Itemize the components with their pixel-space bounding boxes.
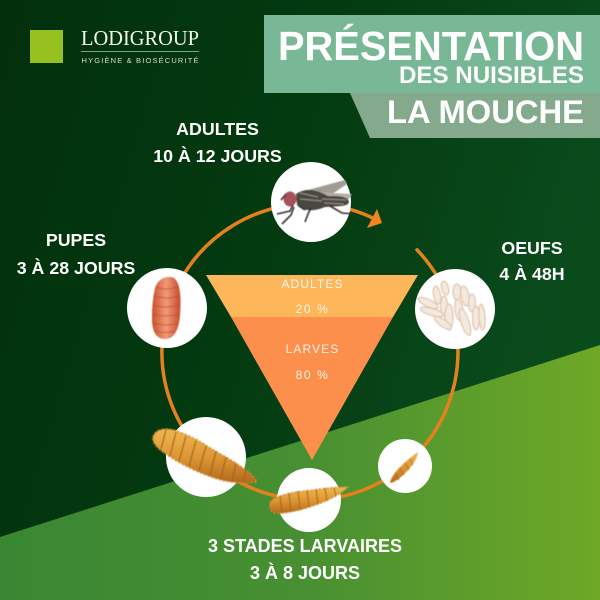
logo: Lodigroup: HYGIÈNE & BIOSÉCURITÉ [82,56,198,65]
label: oeufs [499,238,565,284]
icon: eggs [415,269,495,349]
label: stades larvaires [208,536,402,583]
icon: pupa [127,268,207,348]
funnel chart: adults and larvae: 20 % [296,302,329,316]
label: oeufs: 4 À 48H [499,263,565,284]
icon: medium larva [270,468,348,532]
label: adultes: 10 À 12 JOURS [153,145,282,166]
funnel chart: adults and larvae: ADULTES [281,277,344,291]
label: pupes: 3 À 28 JOURS [17,257,135,278]
title banner: LA MOUCHE [387,94,584,130]
logo: Lodigroup [30,26,199,65]
icon: fly [271,162,353,242]
label: pupes [17,230,135,278]
title banner: DES NUISIBLES [399,62,584,89]
label: stades larvaires: 3 STADES LARVAIRES [208,536,402,556]
icon: small larva [378,439,432,493]
label: oeufs: OEUFS [501,238,563,258]
life cycle ring with arrow [162,204,458,500]
funnel chart: adults and larvae [206,275,418,460]
title banner: PRÉSENTATION [278,23,584,69]
funnel chart: adults and larvae: 80 % [296,368,329,382]
label: pupes: PUPES [46,230,106,250]
label: adultes [153,119,282,166]
label: stades larvaires: 3 À 8 JOURS [250,562,360,583]
logo: Lodigroup: LODIGROUP [81,26,199,50]
title banner [264,15,600,138]
icon: large larva [153,417,257,497]
label: adultes: ADULTES [176,119,259,139]
funnel chart: adults and larvae: LARVES [286,342,339,356]
